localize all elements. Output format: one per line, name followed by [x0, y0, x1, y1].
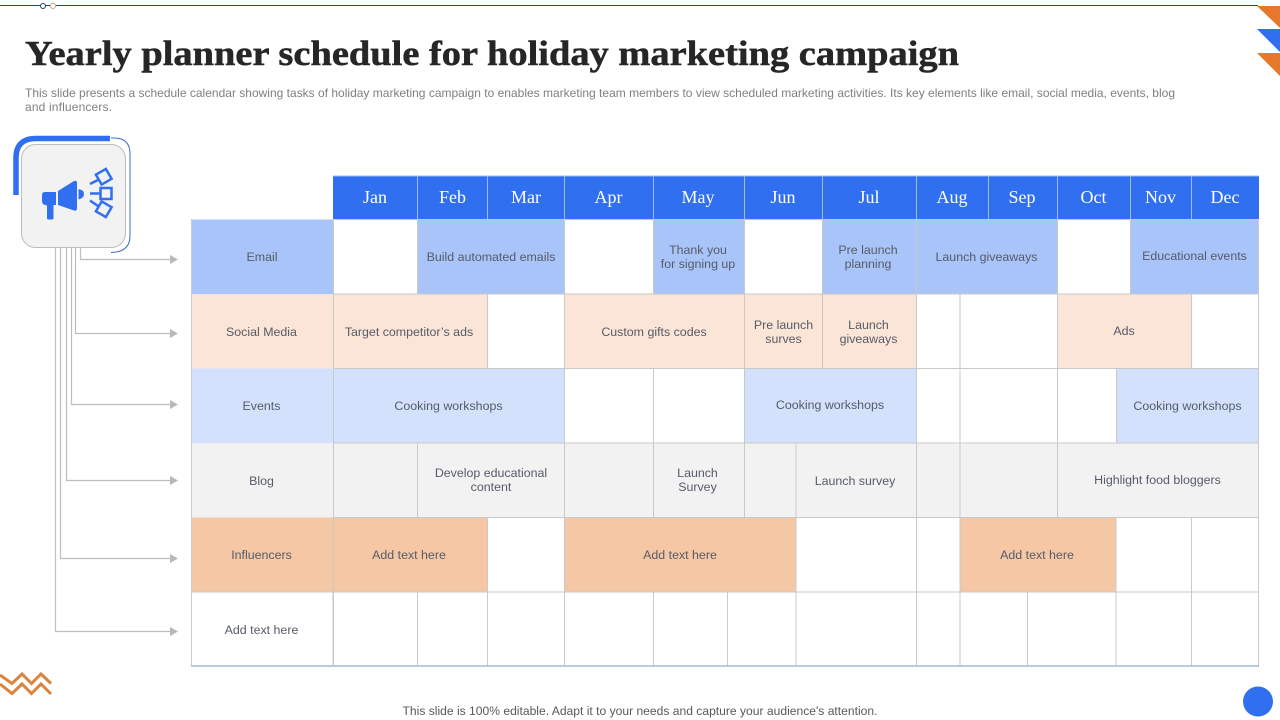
social media tasks: Target competitor’s ads	[345, 325, 473, 339]
influencer tasks: Add text here	[1000, 548, 1074, 562]
influencer tasks: Add text here	[372, 548, 446, 562]
row labels: Email	[247, 250, 277, 264]
events tasks: Cooking workshops	[776, 398, 884, 412]
description: This slide presents a schedule calendar showing tasks of holiday marketing campaign to enables marketing team members to view scheduled marketing activities. Its key elements like email, social media, events, blog	[25, 86, 1175, 100]
row labels: Social Media	[226, 325, 297, 339]
social media tasks: surves	[765, 332, 802, 346]
blog tasks: Launch survey	[815, 474, 896, 488]
row labels: Influencers	[231, 548, 292, 562]
month header: Jun	[770, 187, 796, 207]
icon badge	[16, 138, 130, 252]
row: Email	[192, 220, 1258, 294]
blog tasks: Launch	[677, 466, 718, 480]
month header: Feb	[439, 187, 466, 207]
row: Blog	[192, 443, 1258, 518]
top rule	[0, 4, 1258, 8]
month header: May	[682, 187, 714, 207]
social media tasks: Ads	[1113, 324, 1135, 338]
social media tasks: Pre launch	[754, 318, 813, 332]
email tasks: Launch giveaways	[936, 250, 1037, 264]
month header: Sep	[1008, 187, 1036, 207]
social media tasks: giveaways	[840, 332, 897, 346]
blog tasks: Develop educational	[435, 466, 547, 480]
title: Yearly planner schedule for holiday marketing campaign	[25, 34, 959, 73]
month header	[333, 176, 1259, 219]
month header: Jan	[363, 187, 387, 207]
description	[25, 86, 1175, 114]
row labels: Blog	[249, 474, 274, 488]
influencer tasks	[372, 548, 1074, 562]
month header: Jul	[858, 187, 880, 207]
events tasks: Cooking workshops	[394, 399, 503, 413]
row labels	[225, 250, 298, 637]
email tasks: planning	[845, 257, 892, 271]
page marker circle	[1243, 686, 1273, 716]
events tasks	[394, 398, 1242, 413]
month header: Aug	[936, 187, 968, 207]
email tasks	[427, 243, 1247, 271]
month header: Nov	[1145, 187, 1176, 207]
row: Influencers	[192, 518, 1258, 592]
footer note: This slide is 100% editable. Adapt it to your needs and capture your audience's attention.	[403, 704, 877, 718]
month header: Oct	[1080, 187, 1106, 207]
blog tasks: content	[471, 480, 512, 494]
row: Social Media	[192, 294, 1258, 368]
connector arrows	[56, 248, 178, 636]
influencer tasks: Add text here	[643, 548, 717, 562]
blog tasks: Survey	[678, 480, 718, 494]
blog tasks	[435, 466, 1221, 494]
row labels: Add text here	[225, 623, 298, 637]
row labels: Events	[243, 399, 280, 413]
email tasks: Thank you	[669, 243, 727, 257]
social media tasks: Custom gifts codes	[601, 325, 707, 339]
icon: signal nodes	[90, 169, 112, 217]
row: Add text here	[192, 592, 1258, 666]
blog tasks: Highlight food bloggers	[1094, 473, 1221, 487]
social media tasks: Launch	[848, 318, 889, 332]
row: Events	[192, 368, 1258, 443]
email tasks: Build automated emails	[427, 250, 555, 264]
icon: megaphone	[42, 181, 84, 220]
table left and bottom edges	[191, 219, 1259, 666]
month header: Dec	[1211, 187, 1239, 207]
social media tasks	[345, 318, 1135, 346]
description: and influencers.	[25, 100, 112, 114]
zigzag decoration	[0, 674, 51, 694]
email tasks: for signing up	[661, 257, 735, 271]
email tasks: Pre launch	[838, 243, 898, 257]
email tasks: Educational events	[1142, 249, 1247, 263]
decorative corner triangles	[1257, 6, 1280, 76]
month header: Apr	[594, 187, 622, 207]
month header: Mar	[511, 187, 541, 207]
events tasks: Cooking workshops	[1133, 399, 1242, 413]
